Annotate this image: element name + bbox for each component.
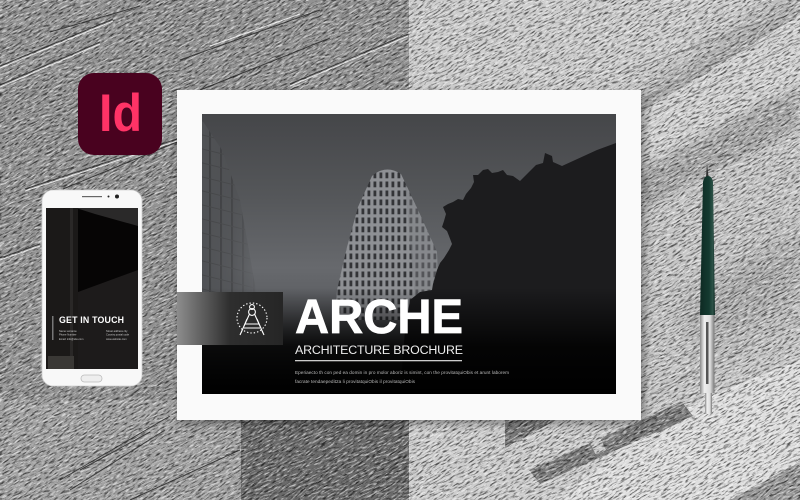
phone heading: GET IN TOUCH	[59, 315, 124, 325]
subtitle: ARCHITECTURE BROCHURE	[295, 343, 463, 357]
phone contact text: Street address city	[106, 329, 128, 333]
title: ARCHE	[295, 291, 463, 344]
phone contact text: Country postal code	[106, 332, 130, 336]
icon: InDesign app: Id	[99, 84, 142, 143]
phone mockup	[42, 190, 142, 386]
left glass building	[202, 122, 251, 292]
phone screen	[46, 208, 138, 369]
phone contact text: Name surname	[59, 329, 77, 333]
phone contact text: Phone Number	[59, 332, 77, 336]
tree and dark building	[400, 143, 616, 394]
pen	[700, 163, 715, 414]
body copy	[295, 370, 509, 384]
cover photo	[202, 114, 616, 394]
brochure shadow	[180, 95, 644, 423]
body copy: Eperiaecto th con ped ea domin in pro molor aboriz is simint, con the provitatquiObis et arunt laborem	[295, 370, 509, 375]
body copy: facrate tendaepedit2a li provitatquiObis il provitatquiObis	[295, 379, 416, 384]
panel: brochure cover	[177, 90, 641, 420]
phone contact text	[59, 329, 130, 341]
bottom fade	[202, 288, 616, 394]
icon: compass logo	[237, 303, 267, 335]
central tower	[335, 169, 438, 320]
phone contact text: www.website.com	[106, 337, 127, 341]
phone contact text: Email: info@site.com	[59, 337, 83, 341]
icon: InDesign app	[78, 73, 162, 155]
logo band	[177, 292, 283, 345]
